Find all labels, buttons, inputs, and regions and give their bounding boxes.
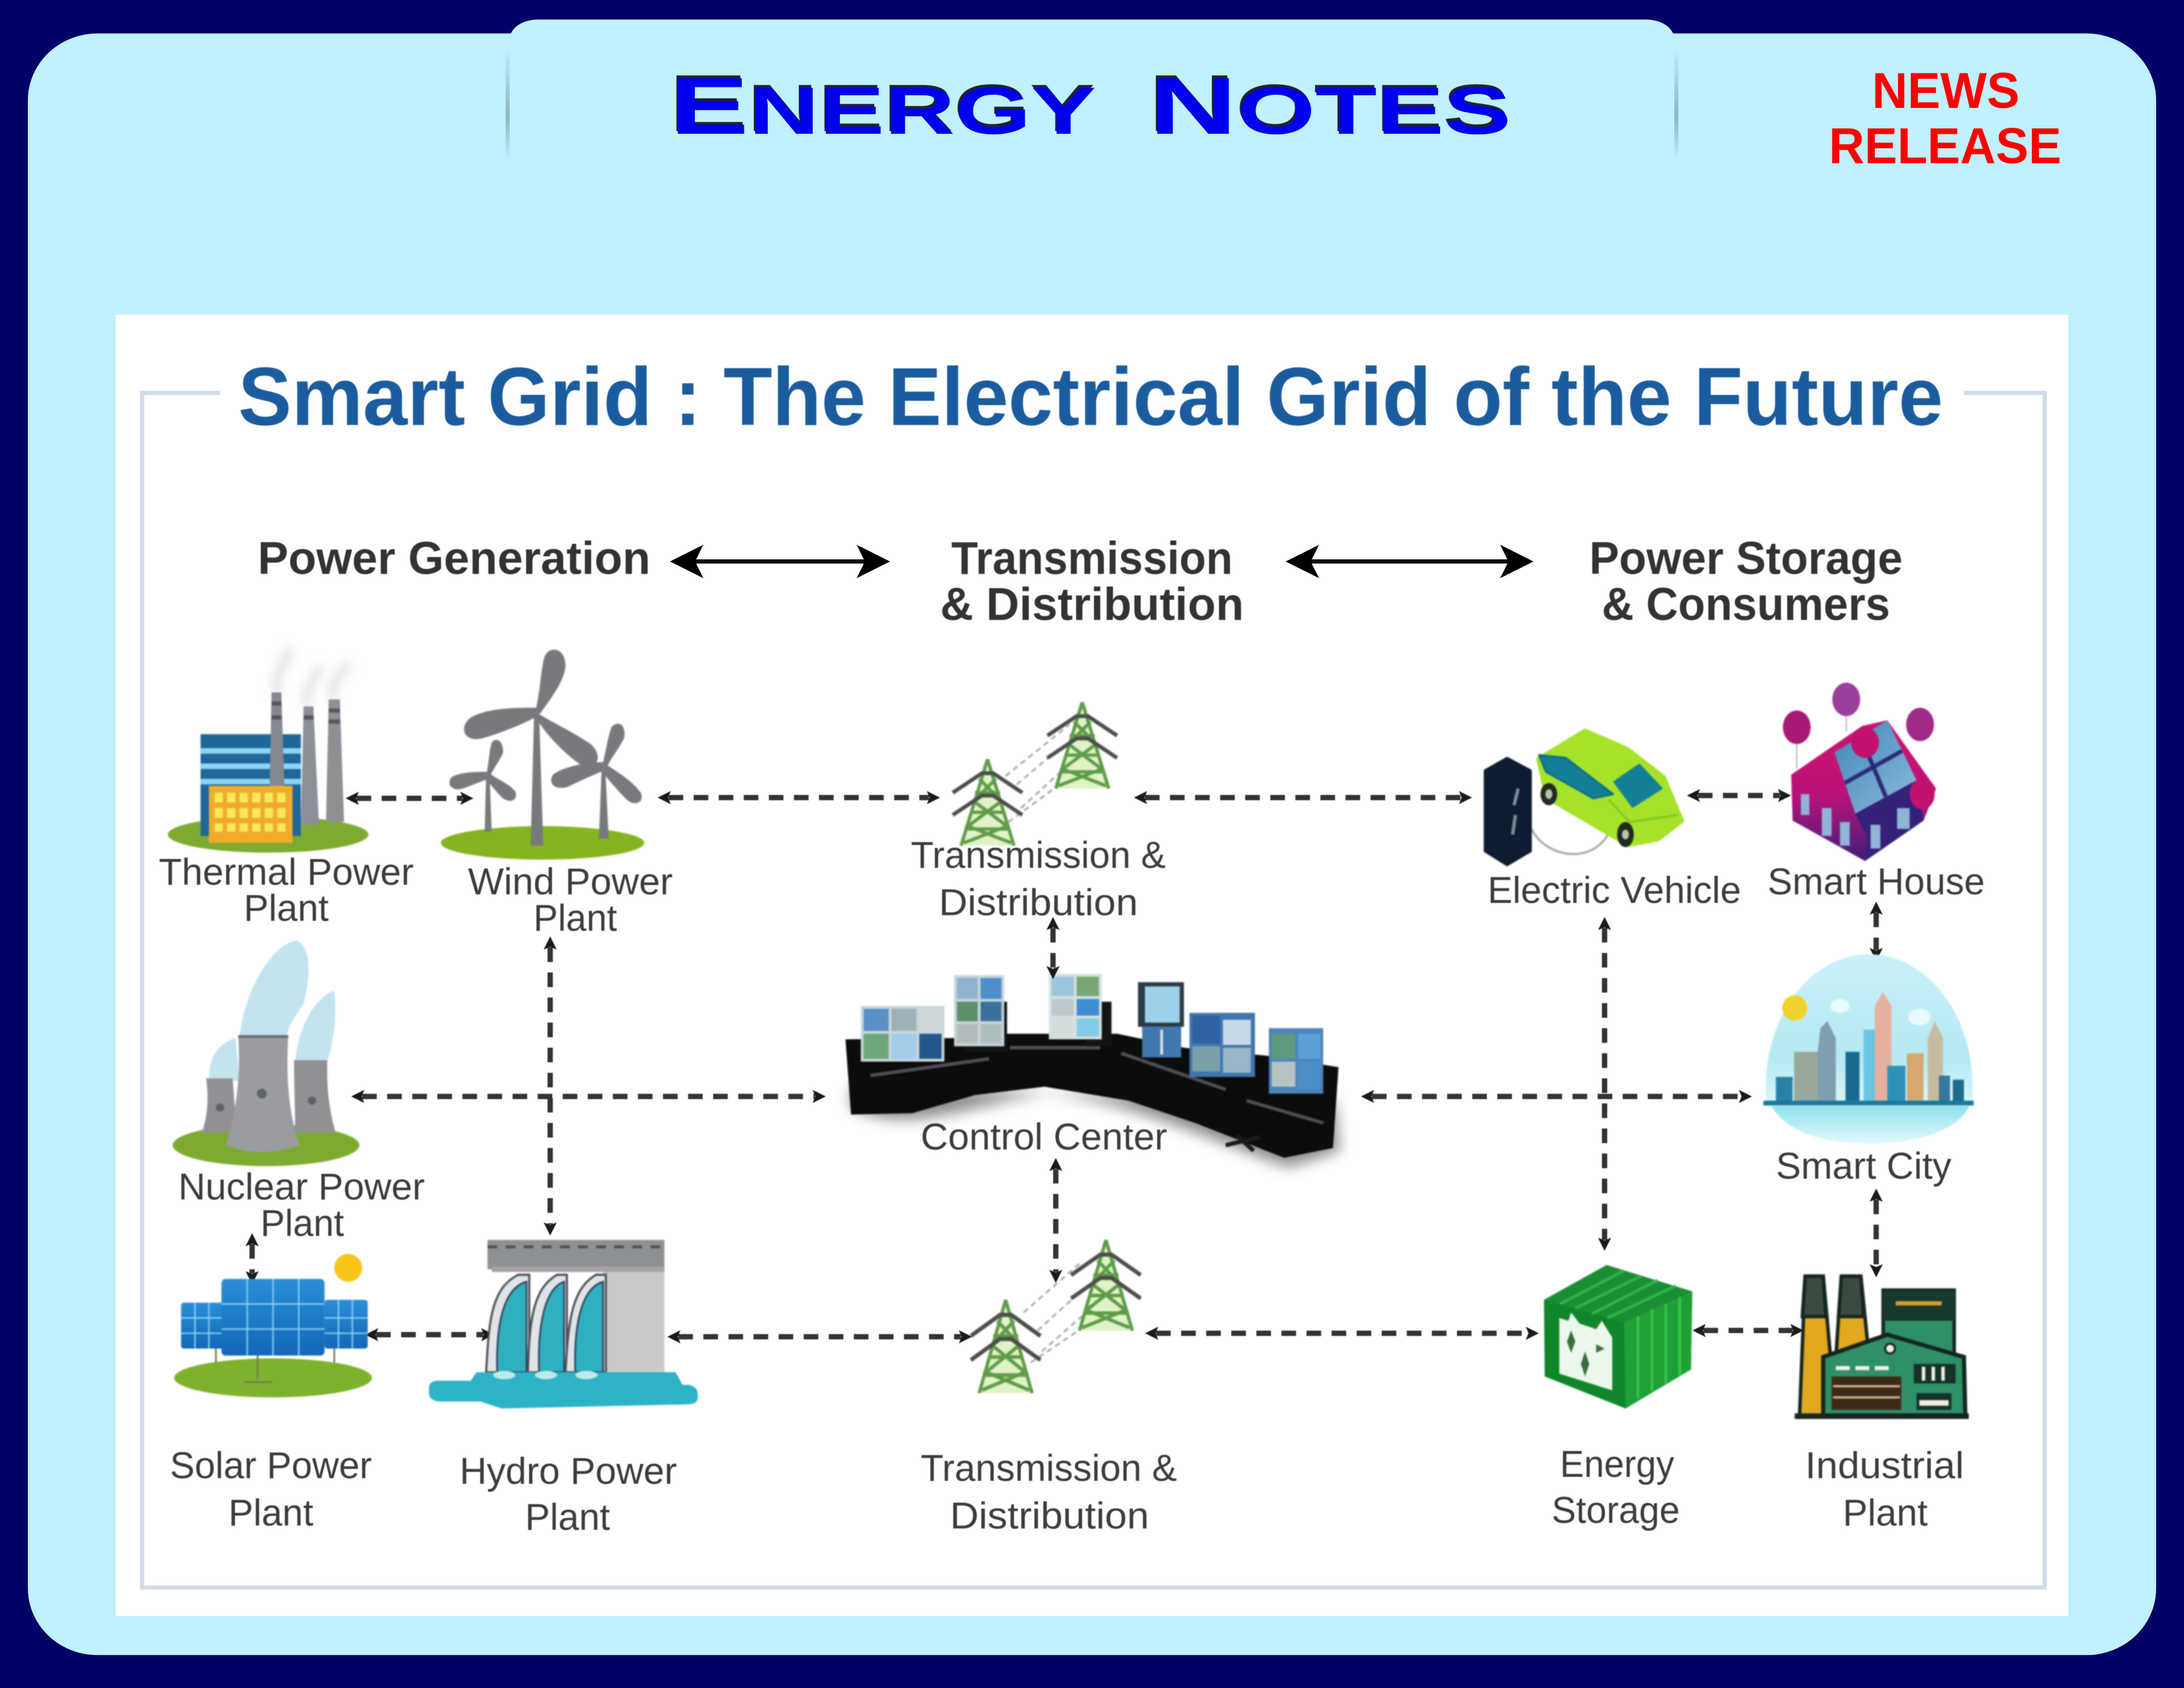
- label: energy storage: Energy: [1560, 1444, 1674, 1485]
- column heading: power storage and consumers: [1589, 532, 1903, 630]
- white infographic panel: [116, 315, 2068, 1616]
- label: upper transmission and distribution: [911, 835, 1166, 924]
- label: nuclear power plant: Nuclear Power: [178, 1166, 425, 1208]
- icon: smart city: [1763, 955, 1974, 1144]
- label: industrial plant: Plant: [1843, 1493, 1928, 1534]
- label: hydro power plant: Hydro Power: [460, 1450, 677, 1492]
- label: thermal power plant: [159, 851, 414, 929]
- title: Notes word: N OTES: [1149, 61, 1511, 151]
- icon: nuclear power plant: [173, 941, 359, 1166]
- column heading: transmission and distribution: [940, 532, 1244, 630]
- arrow: generation to transmission: [674, 561, 886, 563]
- column heading: power storage and consumers: Power Storage: [1589, 532, 1903, 584]
- label: wind power plant: [468, 861, 673, 939]
- label: industrial plant: [1805, 1445, 1964, 1534]
- column heading: power storage and consumers: & Consumers: [1602, 579, 1890, 630]
- icon: wind power plant: [441, 649, 644, 860]
- column heading: transmission and distribution: & Distribution: [940, 579, 1244, 630]
- icon: energy storage: [1544, 1265, 1692, 1409]
- label: upper transmission and distribution: Transmission &: [911, 835, 1166, 876]
- icon: electric vehicle and charger: [1484, 731, 1681, 865]
- column heading: transmission and distribution: Transmission: [951, 532, 1233, 584]
- label: solar power plant: [170, 1445, 372, 1534]
- icon: smart house: [1783, 682, 1936, 861]
- icon: lower transmission towers: [971, 1240, 1141, 1393]
- news release label: RELEASE: [1829, 118, 2062, 174]
- column heading: power generation: Power Generation: [257, 532, 651, 584]
- label: smart city: Smart City: [1776, 1146, 1952, 1188]
- label: electric vehicle: Electric Vehicle: [1488, 870, 1741, 912]
- label: upper transmission and distribution: Distribution: [938, 882, 1138, 924]
- label: control center: Control Center: [921, 1116, 1167, 1158]
- label: nuclear power plant: Plant: [261, 1203, 344, 1244]
- arrow: transmission to storage: [1290, 561, 1529, 563]
- label: hydro power plant: [460, 1450, 677, 1538]
- label: energy storage: Storage: [1552, 1489, 1680, 1531]
- icon: industrial plant: [1795, 1276, 1969, 1419]
- label: nuclear power plant: [178, 1166, 425, 1244]
- news release label: [1829, 63, 2062, 174]
- icon: hydro power plant: [429, 1240, 698, 1409]
- label: solar power plant: Solar Power: [170, 1445, 372, 1487]
- label: smart house: Smart House: [1768, 861, 1985, 903]
- label: energy storage: [1552, 1444, 1680, 1531]
- dashed connector arrows: [252, 796, 1876, 1336]
- label: wind power plant: Wind Power: [468, 861, 673, 903]
- icon: control center: [845, 974, 1340, 1168]
- label: solar power plant: Plant: [228, 1493, 314, 1534]
- label: lower transmission and distribution: Transmission &: [921, 1448, 1177, 1489]
- icon: thermal power plant: [168, 648, 369, 853]
- label: lower transmission and distribution: [921, 1448, 1177, 1537]
- label: hydro power plant: Plant: [525, 1497, 610, 1538]
- title: Energy Notes: E NERGY: [670, 61, 1096, 151]
- icon: solar power plant: [174, 1254, 372, 1397]
- header tab: [506, 20, 1678, 173]
- icon: upper transmission towers: [953, 702, 1117, 846]
- label: wind power plant: Plant: [533, 898, 617, 939]
- label: lower transmission and distribution: Distribution: [950, 1495, 1149, 1537]
- label: thermal power plant: Thermal Power: [159, 851, 414, 893]
- label: thermal power plant: Plant: [244, 888, 329, 929]
- infographic heading: Smart Grid : The Electrical Grid of the Future: [238, 352, 1943, 443]
- label: industrial plant: Industrial: [1805, 1445, 1964, 1487]
- news release label: NEWS: [1872, 63, 2020, 119]
